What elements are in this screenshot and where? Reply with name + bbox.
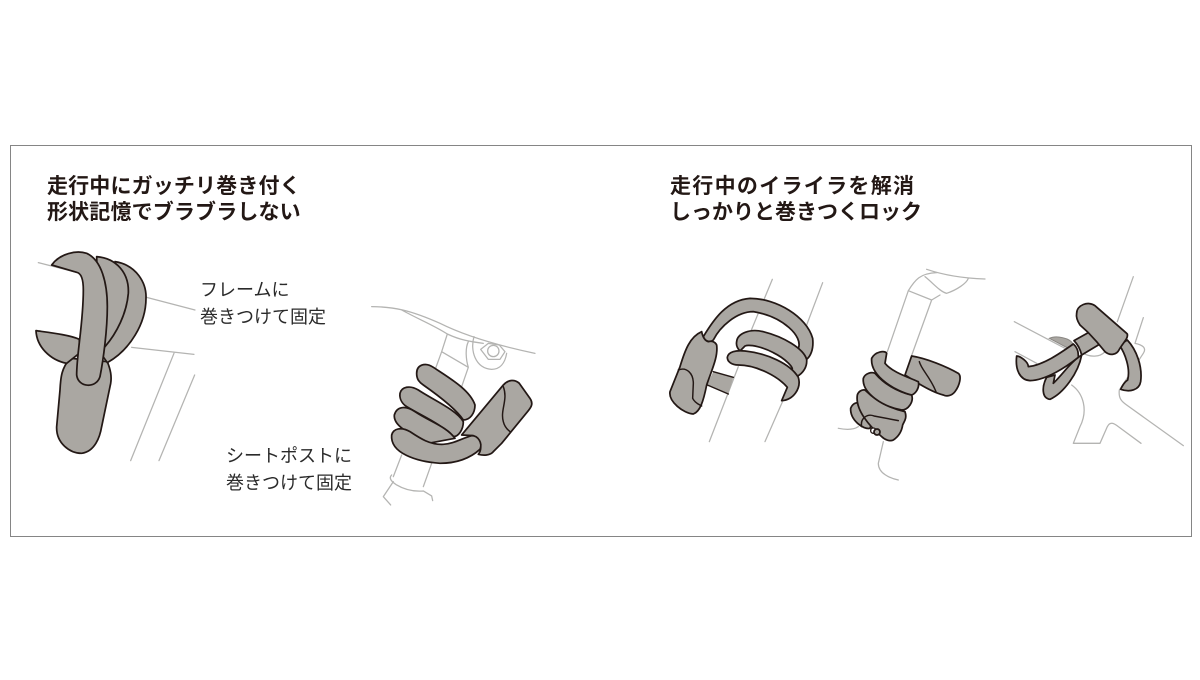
illustration: lock hooked near frame junction [1014,277,1183,446]
heading: right feature: 走行中のイライラを解消 [670,175,915,198]
label: frame mounting: フレームに [200,280,289,300]
panel: outer frame [10,145,1192,537]
label: seatpost mounting [226,446,352,493]
heading: left feature: 形状記憶でブラブラしない [47,201,301,224]
heading: right feature: しっかりと巻きつくロック [670,201,922,224]
label: seatpost mounting: 巻きつけて固定 [226,473,352,493]
label: frame mounting [200,280,326,327]
illustration: lock wrapped on frame [36,252,195,461]
label: seatpost mounting: シートポストに [226,446,352,466]
label: frame mounting: 巻きつけて固定 [200,307,326,327]
illustration: lock wrapped on seatpost [372,307,535,505]
heading: left feature: 走行中にガッチリ巻き付く [47,175,301,198]
heading: left feature [47,174,301,224]
illustration: lock coiled on seat tube [838,269,985,480]
illustration: lock coiled on tube, open view [670,279,823,442]
heading: right feature [670,174,922,224]
